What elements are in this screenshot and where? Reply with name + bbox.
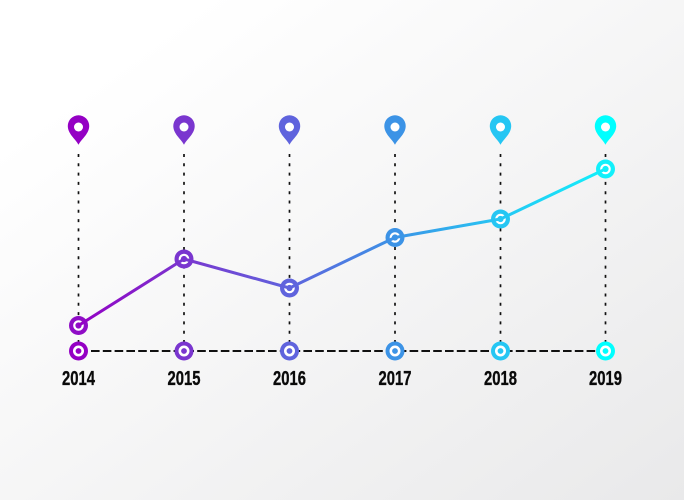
line chart	[78, 169, 606, 326]
year labels: 2017	[378, 367, 412, 390]
location pins	[68, 115, 616, 145]
baseline markers	[69, 342, 615, 360]
pin 2016	[279, 115, 300, 145]
data points markers under line	[69, 160, 615, 335]
pin 2017	[384, 115, 406, 145]
pin 2014	[68, 115, 89, 145]
year labels: 2014	[62, 367, 95, 390]
pin 2018	[490, 115, 511, 145]
year labels: 2019	[589, 367, 622, 390]
year labels: 2015	[168, 367, 200, 390]
year labels	[62, 367, 622, 390]
dashed baseline	[91, 350, 596, 352]
year labels: 2016	[273, 367, 306, 390]
year labels: 2018	[484, 367, 517, 390]
pin 2015	[173, 115, 195, 145]
pin 2019	[595, 115, 616, 145]
dotted vertical guides	[78, 154, 606, 345]
